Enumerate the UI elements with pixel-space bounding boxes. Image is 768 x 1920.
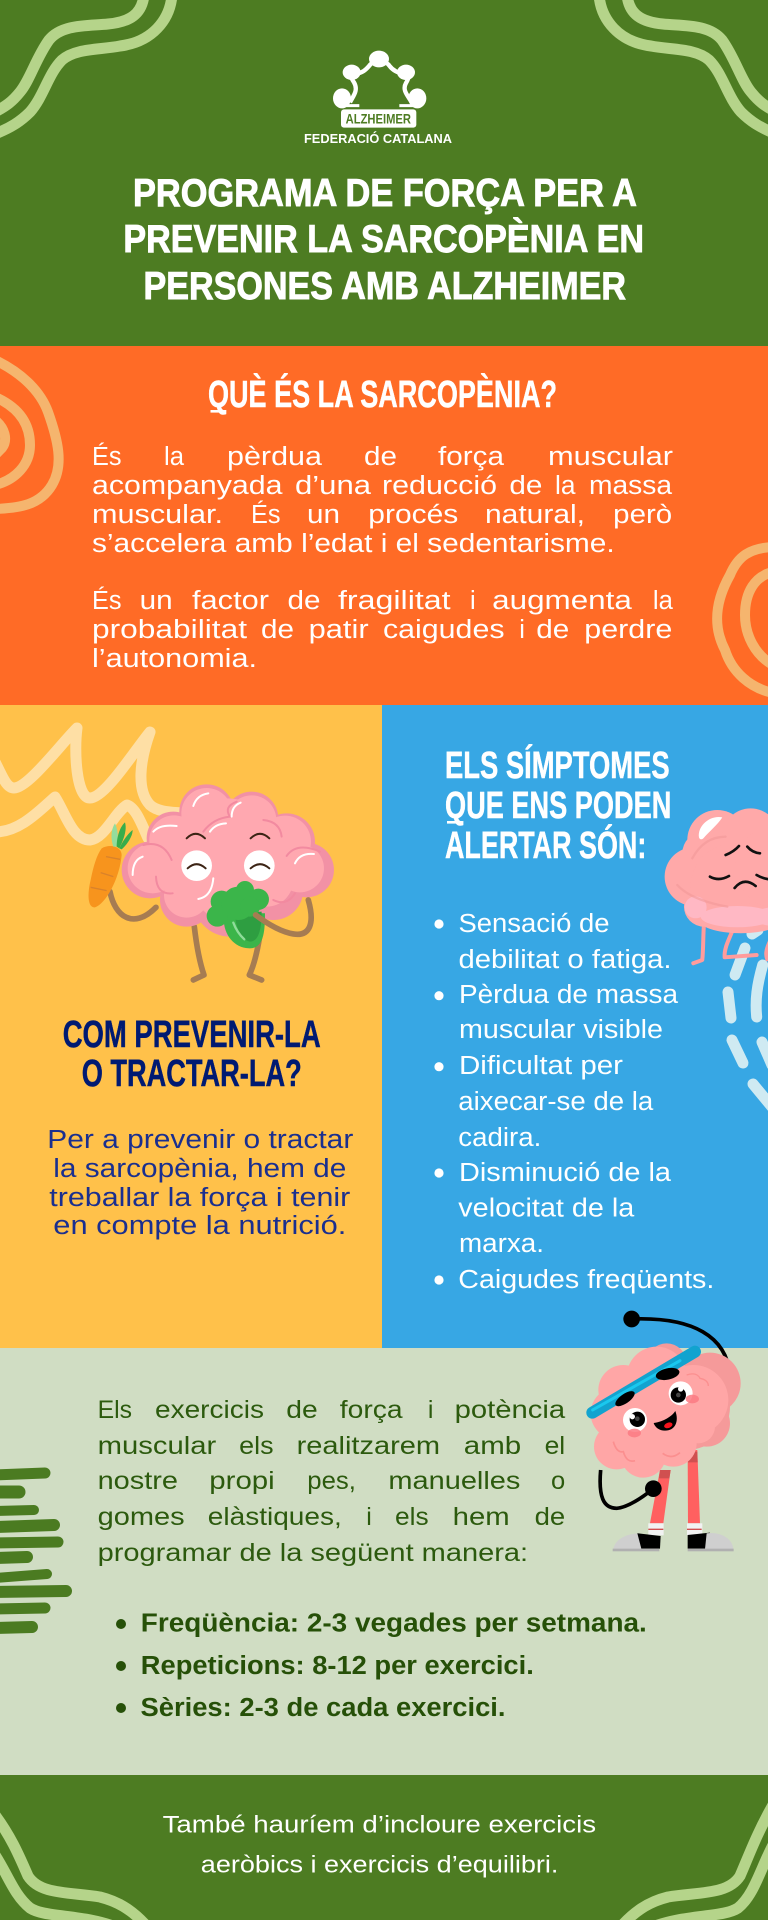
text block: exercises intro: propi	[209, 1467, 275, 1495]
heading: symptoms: QUE ENS PODEN	[445, 785, 671, 827]
text block: exercises intro	[98, 1396, 565, 1567]
list: exercise schedule: Repeticions: 8-12 per exercici.	[141, 1652, 534, 1680]
text block: exercises intro: pes,	[307, 1467, 356, 1495]
text block: exercises intro: força	[340, 1396, 403, 1424]
text block: exercises intro: muscular	[98, 1432, 216, 1460]
list: symptoms: Dificultat per	[459, 1052, 624, 1080]
list: symptoms: muscular visible	[459, 1016, 663, 1044]
text block: closing note: aeròbics i exercicis d’equilibri.	[201, 1852, 558, 1879]
panel: header background	[0, 0, 768, 346]
heading: how to prevent	[63, 1014, 321, 1095]
text block: exercises intro: i	[428, 1396, 433, 1424]
panel: prevention	[0, 705, 382, 1348]
panel: exercises	[0, 1348, 768, 1775]
text block: definition: la	[164, 443, 185, 471]
text block: exercises intro: realitzarem	[297, 1432, 440, 1460]
text block: exercises intro: el	[545, 1432, 565, 1460]
text block: definition: de	[261, 616, 294, 644]
list: exercise schedule	[116, 1610, 647, 1722]
list: exercise schedule: Sèries: 2-3 de cada exercici.	[140, 1694, 506, 1722]
text block: exercises intro: exercicis	[155, 1396, 264, 1424]
text block: definition: patir	[309, 616, 369, 644]
icon: sad brain	[665, 808, 768, 963]
icon: exercising brain	[591, 1311, 741, 1551]
text block: definition: caigudes	[383, 616, 504, 644]
text block: definition: d’una	[295, 472, 372, 500]
decoration: left spiral	[0, 360, 59, 509]
text block: exercises intro: elàstiques,	[208, 1503, 342, 1531]
text block: definition: muscular	[548, 443, 674, 471]
text block: definition: probabilitat	[92, 616, 247, 644]
text block: exercises intro: de	[535, 1503, 565, 1531]
text block: definition: muscular.	[92, 501, 223, 529]
text block: definition: un	[140, 587, 173, 615]
heading: how to prevent: O TRACTAR-LA?	[82, 1053, 302, 1095]
heading: symptoms	[445, 743, 671, 867]
text block: definition: i	[519, 616, 525, 644]
list: symptoms: aixecar-se de la	[458, 1088, 654, 1116]
text block: definition: la	[555, 472, 576, 500]
list: symptoms	[434, 910, 714, 1294]
title	[123, 172, 644, 308]
text block: definition: natural,	[485, 501, 585, 529]
text block: exercises intro: hem	[453, 1503, 510, 1531]
text block: exercises intro: programar de la següent manera:	[98, 1539, 528, 1567]
list: exercise schedule: Freqüència: 2-3 vegades per setmana.	[141, 1610, 647, 1638]
text block: definition: i	[470, 587, 476, 615]
text block: definition: força	[438, 443, 505, 471]
text block: prevention: la sarcopènia, hem de	[53, 1155, 346, 1183]
heading: what is sarcopenia: QUÈ ÉS LA SARCOPÈNIA?	[208, 372, 557, 416]
text block: closing note	[163, 1812, 596, 1879]
title: PROGRAMA DE FORÇA PER A	[133, 172, 637, 215]
text block: definition: fragilitat	[338, 587, 451, 615]
decoration: top-left waves	[0, 0, 172, 134]
text block: definition: augmenta	[492, 587, 633, 615]
heading: how to prevent: COM PREVENIR-LA	[63, 1014, 321, 1056]
list: symptoms: cadira.	[458, 1124, 541, 1152]
text block: definition: la	[653, 587, 674, 615]
text block: definition: un	[307, 501, 340, 529]
text block: definition: És	[92, 586, 122, 615]
text block: definition: pèrdua	[227, 443, 323, 471]
list: symptoms: Disminució de la	[459, 1159, 672, 1187]
text block: definition: És	[251, 500, 280, 529]
text block: definition: reducció	[382, 472, 497, 500]
list: symptoms: Sensació de	[458, 910, 610, 938]
text block: exercises intro: potència	[455, 1396, 565, 1424]
text block: definition: massa	[589, 472, 673, 500]
text block: definition: perdre	[584, 616, 672, 644]
decoration: green brush strokes	[0, 1473, 66, 1628]
text block: exercises intro: nostre	[98, 1467, 178, 1495]
text block: definition: És	[92, 442, 122, 471]
text block: prevention: treballar la força i tenir	[49, 1184, 351, 1212]
text block: definition: de	[536, 616, 569, 644]
decoration: bottom-left waves	[0, 1815, 150, 1920]
icon: happy brain with carrot and broccoli	[89, 784, 334, 980]
decoration: top-right waves	[599, 0, 768, 134]
logo: Alzheimer Federació Catalana: ALZHEIMER	[346, 112, 411, 127]
list: symptoms: Pèrdua de massa	[459, 981, 679, 1009]
text block: definition: però	[613, 501, 672, 529]
logo: Alzheimer Federació Catalana	[304, 51, 452, 146]
text block: exercises intro: els	[239, 1432, 274, 1460]
text block: definition: de	[509, 472, 542, 500]
text block: definition: de	[364, 443, 397, 471]
text block: definition: de	[288, 587, 320, 615]
panel: symptoms	[382, 705, 768, 1348]
text block: exercises intro: amb	[464, 1432, 521, 1460]
decoration: squiggle	[0, 728, 182, 840]
list: symptoms: Caigudes freqüents.	[458, 1266, 714, 1294]
logo: Alzheimer Federació Catalana: FEDERACIÓ CATALANA	[304, 131, 452, 146]
text block: definition: s’accelera amb l’edat i el sedentarisme.	[92, 530, 615, 558]
text block: definition: procés	[368, 501, 458, 529]
heading: symptoms: ELS SÍMPTOMES	[445, 743, 670, 787]
text block: exercises intro: i	[366, 1503, 372, 1531]
text block: prevention	[47, 1126, 354, 1240]
text block: definition: acompanyada	[92, 472, 283, 500]
text block: exercises intro: manuelles	[388, 1467, 520, 1495]
decoration: rain dashes	[728, 930, 768, 1107]
panel: footer	[0, 1775, 768, 1920]
text block: definition: factor	[192, 587, 270, 615]
text block: exercises intro: de	[286, 1396, 318, 1424]
text block: definition: l’autonomia.	[92, 645, 257, 673]
title: PERSONES AMB ALZHEIMER	[144, 265, 626, 308]
text block: exercises intro: els	[395, 1503, 429, 1531]
text block: closing note: També hauríem d’incloure exercicis	[163, 1812, 596, 1839]
heading: symptoms: ALERTAR SÓN:	[445, 823, 646, 867]
list: symptoms: marxa.	[459, 1230, 544, 1258]
text block: exercises intro: Els	[98, 1396, 132, 1424]
list: symptoms: debilitat o fatiga.	[458, 946, 672, 974]
text block: prevention: Per a prevenir o tractar	[47, 1126, 354, 1154]
text block: definition	[92, 442, 674, 673]
text block: prevention: en compte la nutrició.	[53, 1212, 346, 1240]
decoration: bottom-right waves	[618, 1805, 768, 1920]
text block: exercises intro: o	[551, 1467, 565, 1495]
text block: exercises intro: gomes	[98, 1503, 185, 1531]
decoration: right spiral	[717, 547, 768, 693]
list: symptoms: velocitat de la	[458, 1195, 635, 1223]
title: PREVENIR LA SARCOPÈNIA EN	[123, 217, 644, 261]
panel: what is sarcopenia	[0, 346, 768, 705]
